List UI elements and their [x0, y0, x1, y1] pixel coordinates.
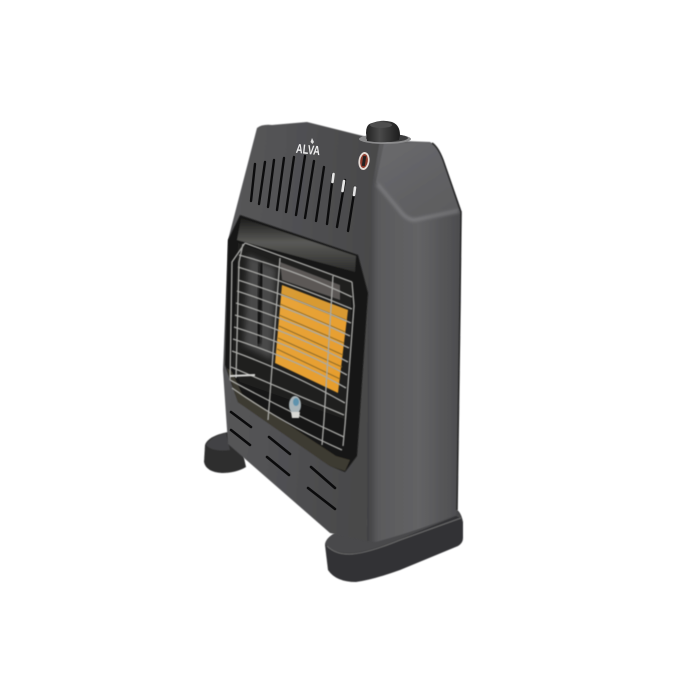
- body: facet highlight: [377, 184, 459, 220]
- logo: ALVA: [295, 138, 321, 158]
- foot: left: [204, 432, 246, 473]
- logo: ALVA: ALVA: [295, 141, 321, 158]
- body: front face: [223, 122, 384, 541]
- chrome safety grill: [230, 243, 354, 450]
- lower vent slots: [231, 412, 335, 509]
- control knob: [359, 121, 411, 144]
- gas valve: [289, 396, 301, 418]
- window bezel: [225, 215, 368, 472]
- body: side face: [367, 140, 461, 542]
- heater body: [223, 122, 461, 542]
- warning badge: [357, 151, 371, 171]
- vent slot highlights: [332, 174, 355, 195]
- body: dark rear edge: [432, 143, 461, 510]
- heating chamber: [232, 243, 352, 420]
- top vent slots: [251, 156, 355, 231]
- ceramic burner panel: [275, 285, 348, 393]
- foot: right: [325, 509, 463, 582]
- body: top right facet: [376, 143, 459, 219]
